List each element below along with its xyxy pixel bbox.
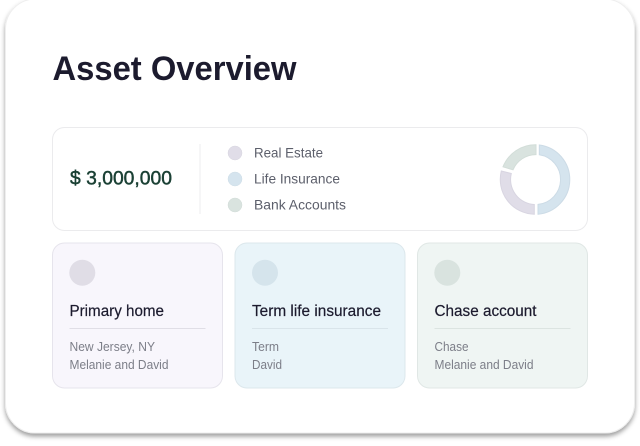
legend item: bank accounts: Bank Accounts [254,196,346,212]
legend item: real estate: Real Estate [254,144,323,160]
card details [252,340,282,372]
segment: real estate [500,171,534,214]
card heading: Term life insurance [252,303,381,320]
segment: life insurance [538,145,570,214]
card details: Term [252,340,279,354]
card details: David [252,358,282,372]
total amount: $ 3,000,000 [70,168,172,190]
card details: Chase [434,340,469,354]
panel: primary home [52,243,222,388]
legend [228,144,346,212]
card heading: Chase account [434,303,537,320]
icon placeholder [434,260,460,286]
donut chart [500,145,570,214]
panel: chase account [418,243,588,388]
card details: Melanie and David [70,358,169,372]
card details [434,340,534,372]
panel: term life insurance [235,243,405,388]
icon placeholder [69,260,95,286]
card details: Melanie and David [434,358,534,372]
title: Asset Overview [52,50,297,88]
card heading: Primary home [70,303,164,320]
card details: New Jersey, NY [70,340,156,354]
icon placeholder [252,260,278,286]
panel: summary [52,128,588,230]
card details [70,340,169,372]
legend item: life insurance: Life Insurance [254,170,340,186]
segment: bank accounts [503,145,536,170]
